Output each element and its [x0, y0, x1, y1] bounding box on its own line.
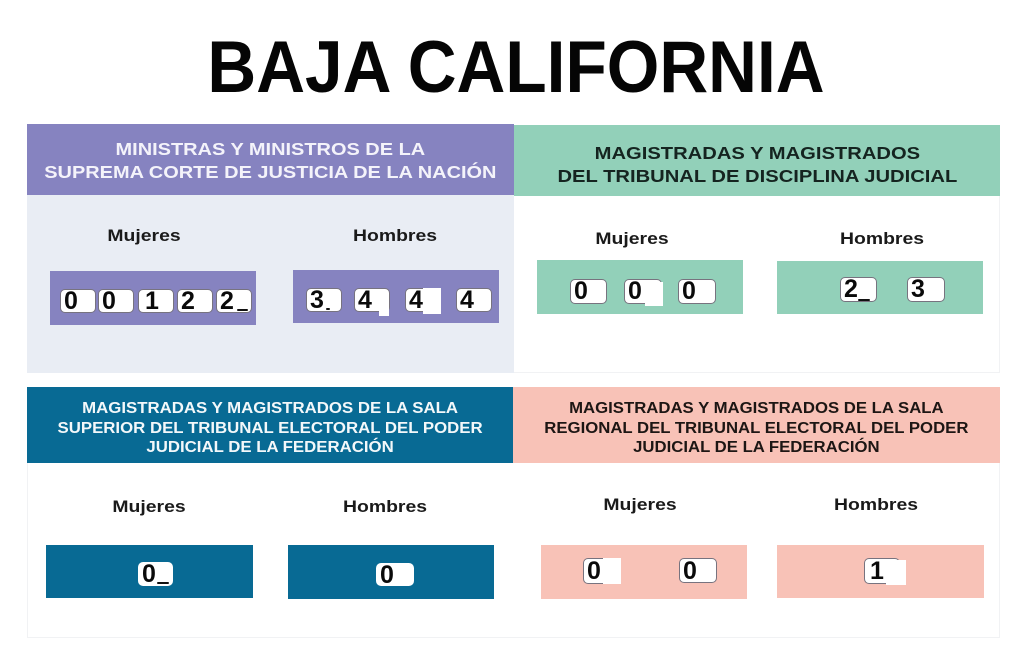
heading: suprema corte [27, 124, 514, 195]
chip 0 [678, 279, 716, 304]
chip 2 [840, 277, 877, 302]
counter: hombres sala regional [777, 545, 984, 598]
counter: hombres suprema corte [293, 270, 499, 323]
chip 3: 3 [911, 275, 925, 303]
heading: suprema corte: MINISTRAS Y MINISTROS DE LA [116, 138, 425, 158]
counter: mujeres suprema corte [50, 271, 256, 325]
chip 4: 4 [409, 286, 423, 314]
chip 0 [60, 289, 96, 313]
chip 0 [376, 563, 414, 586]
label: mujeres suprema corte: Mujeres [107, 226, 181, 245]
chip 0: 0 [64, 287, 78, 315]
chip 0: 0 [142, 560, 156, 588]
label: mujeres sala superior: Mujeres [112, 497, 186, 516]
chip 2 [177, 289, 213, 313]
chip 4 [456, 288, 492, 312]
chip 4 [354, 288, 390, 312]
chip 1: 1 [870, 557, 884, 585]
chip 0: 0 [380, 561, 394, 589]
chip 3 [907, 277, 945, 302]
chip 0 [624, 279, 662, 304]
chip 0 [138, 562, 173, 586]
chip 0: 0 [587, 557, 601, 585]
chip 0: 0 [628, 277, 642, 305]
heading: sala regional: REGIONAL DEL TRIBUNAL ELECTORAL DEL PODER [544, 420, 969, 437]
heading: sala regional: MAGISTRADAS Y MAGISTRADOS DE LA SALA [569, 400, 944, 417]
chip 2: 2 [844, 275, 858, 303]
heading: sala superior: MAGISTRADAS Y MAGISTRADOS DE LA SALA [83, 400, 458, 417]
heading: sala superior [27, 387, 514, 463]
counter: mujeres sala regional [541, 545, 747, 599]
label: mujeres sala regional: Mujeres [603, 495, 677, 514]
label: mujeres disciplina: Mujeres [595, 229, 669, 248]
heading: suprema corte: SUPREMA CORTE DE JUSTICIA DE LA NACIÓN [44, 162, 497, 182]
chip 0 [570, 279, 607, 304]
chip 2: 2 [220, 287, 234, 315]
counter: hombres disciplina [777, 261, 983, 314]
heading: sala superior: SUPERIOR DEL TRIBUNAL ELECTORAL DEL PODER [58, 420, 483, 437]
panel: tribunal de disciplina [514, 125, 1000, 373]
heading: tribunal de disciplina: DEL TRIBUNAL DE DISCIPLINA JUDICIAL [557, 166, 957, 186]
heading: sala regional [513, 387, 1000, 463]
chip 2: 2 [181, 287, 195, 315]
chip 1: 1 [145, 287, 159, 315]
panel: sala regional [513, 387, 1000, 638]
chip 3: 3 [310, 286, 324, 314]
counter: mujeres disciplina [537, 260, 743, 314]
chip 0: 0 [574, 277, 588, 305]
chip 2 [216, 289, 252, 313]
chip 3 [306, 288, 342, 312]
chip 4: 4 [460, 286, 474, 314]
chip 0: 0 [683, 557, 697, 585]
counter: hombres sala superior [288, 545, 494, 599]
heading: tribunal de disciplina: MAGISTRADAS Y MAGISTRADOS [594, 143, 920, 163]
heading: sala superior: JUDICIAL DE LA FEDERACIÓN [147, 439, 394, 456]
title: BAJA CALIFORNIA [207, 27, 825, 108]
counter: mujeres sala superior [46, 545, 253, 598]
chip 0 [583, 558, 621, 584]
chip 1 [138, 289, 174, 313]
label: hombres disciplina: Hombres [840, 229, 924, 248]
heading: sala regional: JUDICIAL DE LA FEDERACIÓN [633, 439, 880, 456]
chip 0 [98, 289, 134, 313]
chip 4 [405, 288, 441, 312]
heading: tribunal de disciplina [514, 125, 1000, 196]
chip 4: 4 [358, 286, 372, 314]
label: hombres sala regional: Hombres [834, 495, 918, 514]
panel: ministras y ministros [27, 124, 514, 373]
chip 1 [864, 558, 900, 584]
chip 0: 0 [102, 287, 116, 315]
label: hombres suprema corte: Hombres [353, 226, 437, 245]
label: hombres sala superior: Hombres [343, 497, 427, 516]
chip 0: 0 [682, 277, 696, 305]
panel: sala superior [27, 387, 514, 638]
chip 0 [679, 558, 717, 583]
